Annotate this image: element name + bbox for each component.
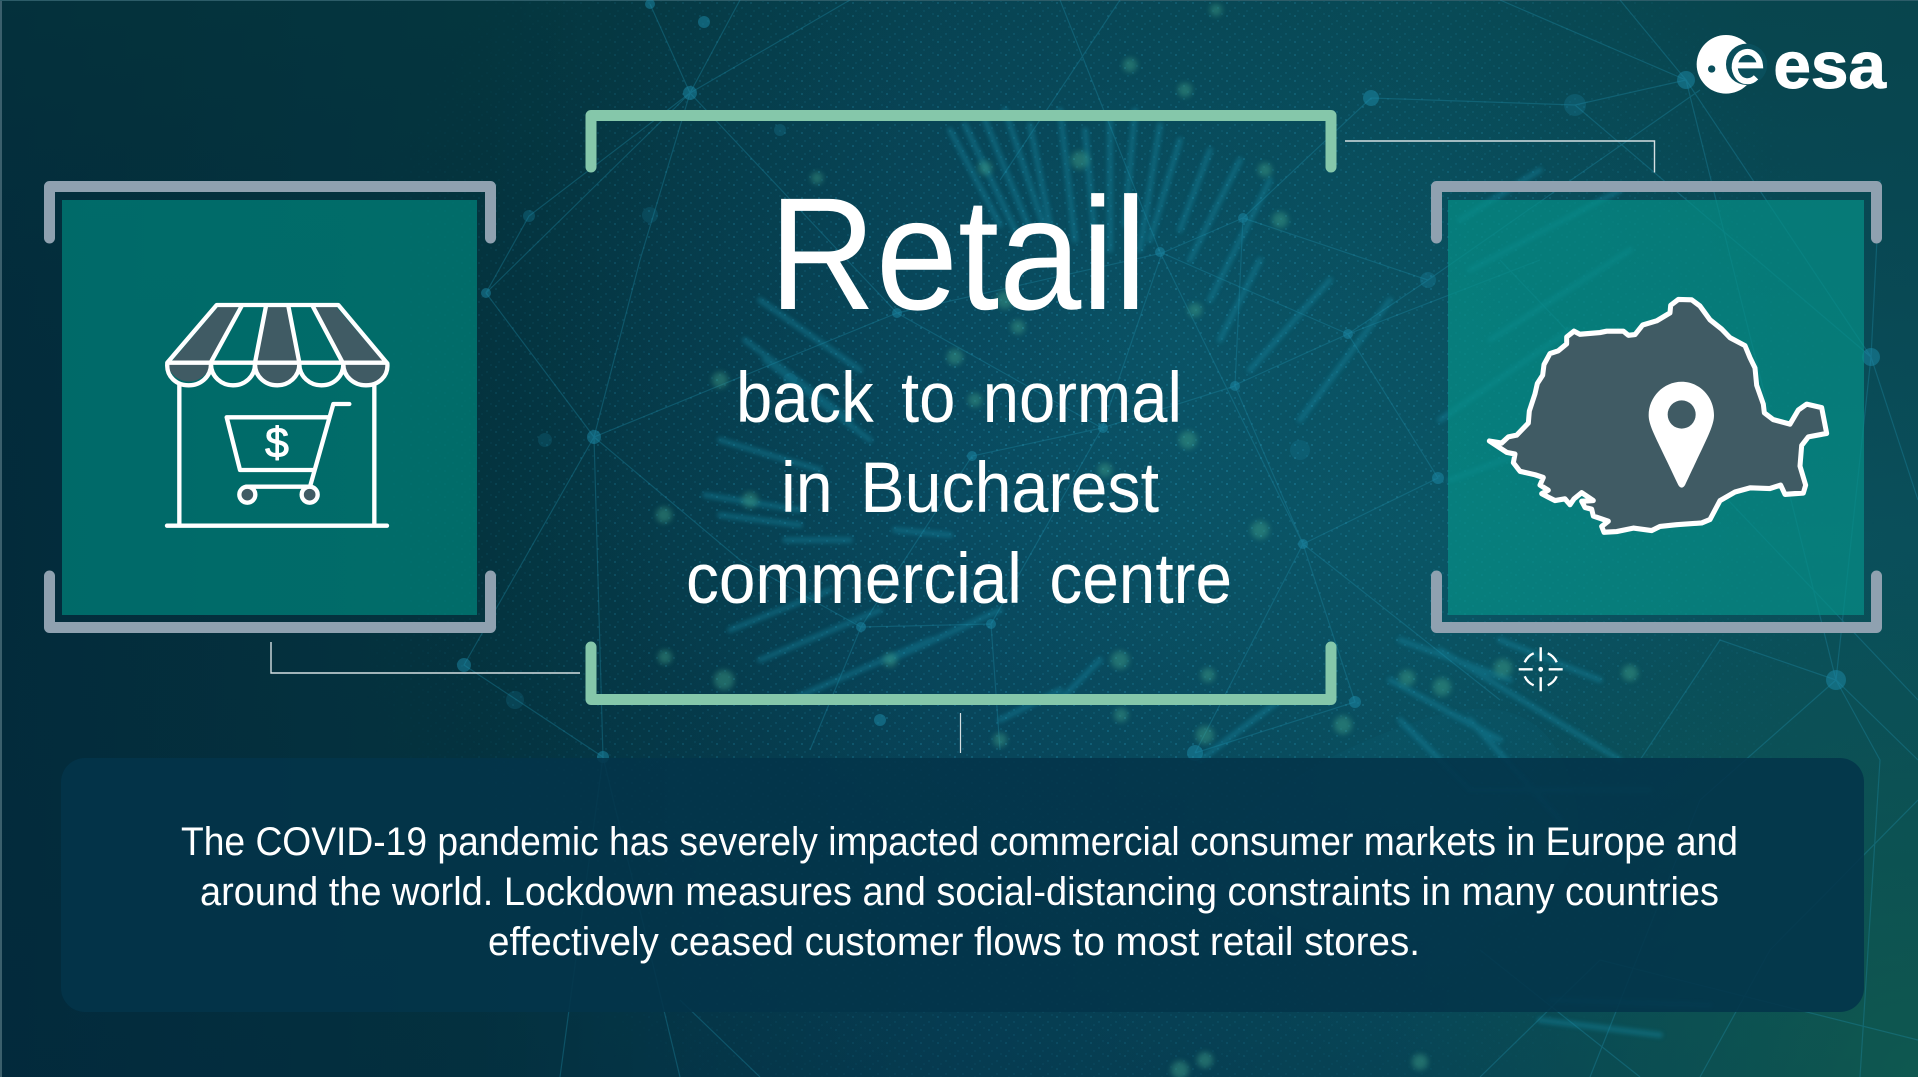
icon: shop with trolley xyxy=(167,305,388,526)
subtitle xyxy=(686,359,1232,619)
icon: shop with trolley: $ xyxy=(265,419,289,467)
subtitle: back to normal xyxy=(736,359,1182,438)
frame: store panel xyxy=(50,186,490,628)
subtitle: in Bucharest xyxy=(781,449,1159,528)
panel: store xyxy=(50,186,490,628)
subtitle: commercial centre xyxy=(686,540,1232,619)
panel: Romania map xyxy=(1436,186,1876,628)
description text xyxy=(181,820,1738,964)
connector: top right xyxy=(1345,141,1654,172)
frame: central title xyxy=(591,116,1331,700)
icon: crosshair target xyxy=(1519,647,1563,691)
title: Retail xyxy=(769,164,1147,343)
panel: description xyxy=(61,758,1864,1012)
map: Romania with location pin xyxy=(1489,299,1827,532)
description text: The COVID-19 pandemic has severely impacted commercial consumer markets in Europe and xyxy=(181,820,1738,864)
description text: around the world. Lockdown measures and social-distancing constraints in many countries xyxy=(200,870,1719,914)
frame: map panel xyxy=(1436,186,1876,628)
connector: left xyxy=(271,642,580,673)
logo: esa: esa xyxy=(1773,28,1887,102)
logo: esa xyxy=(1697,28,1887,102)
connector: centre xyxy=(960,713,962,753)
description text: effectively ceased customer flows to most retail stores. xyxy=(488,920,1420,964)
